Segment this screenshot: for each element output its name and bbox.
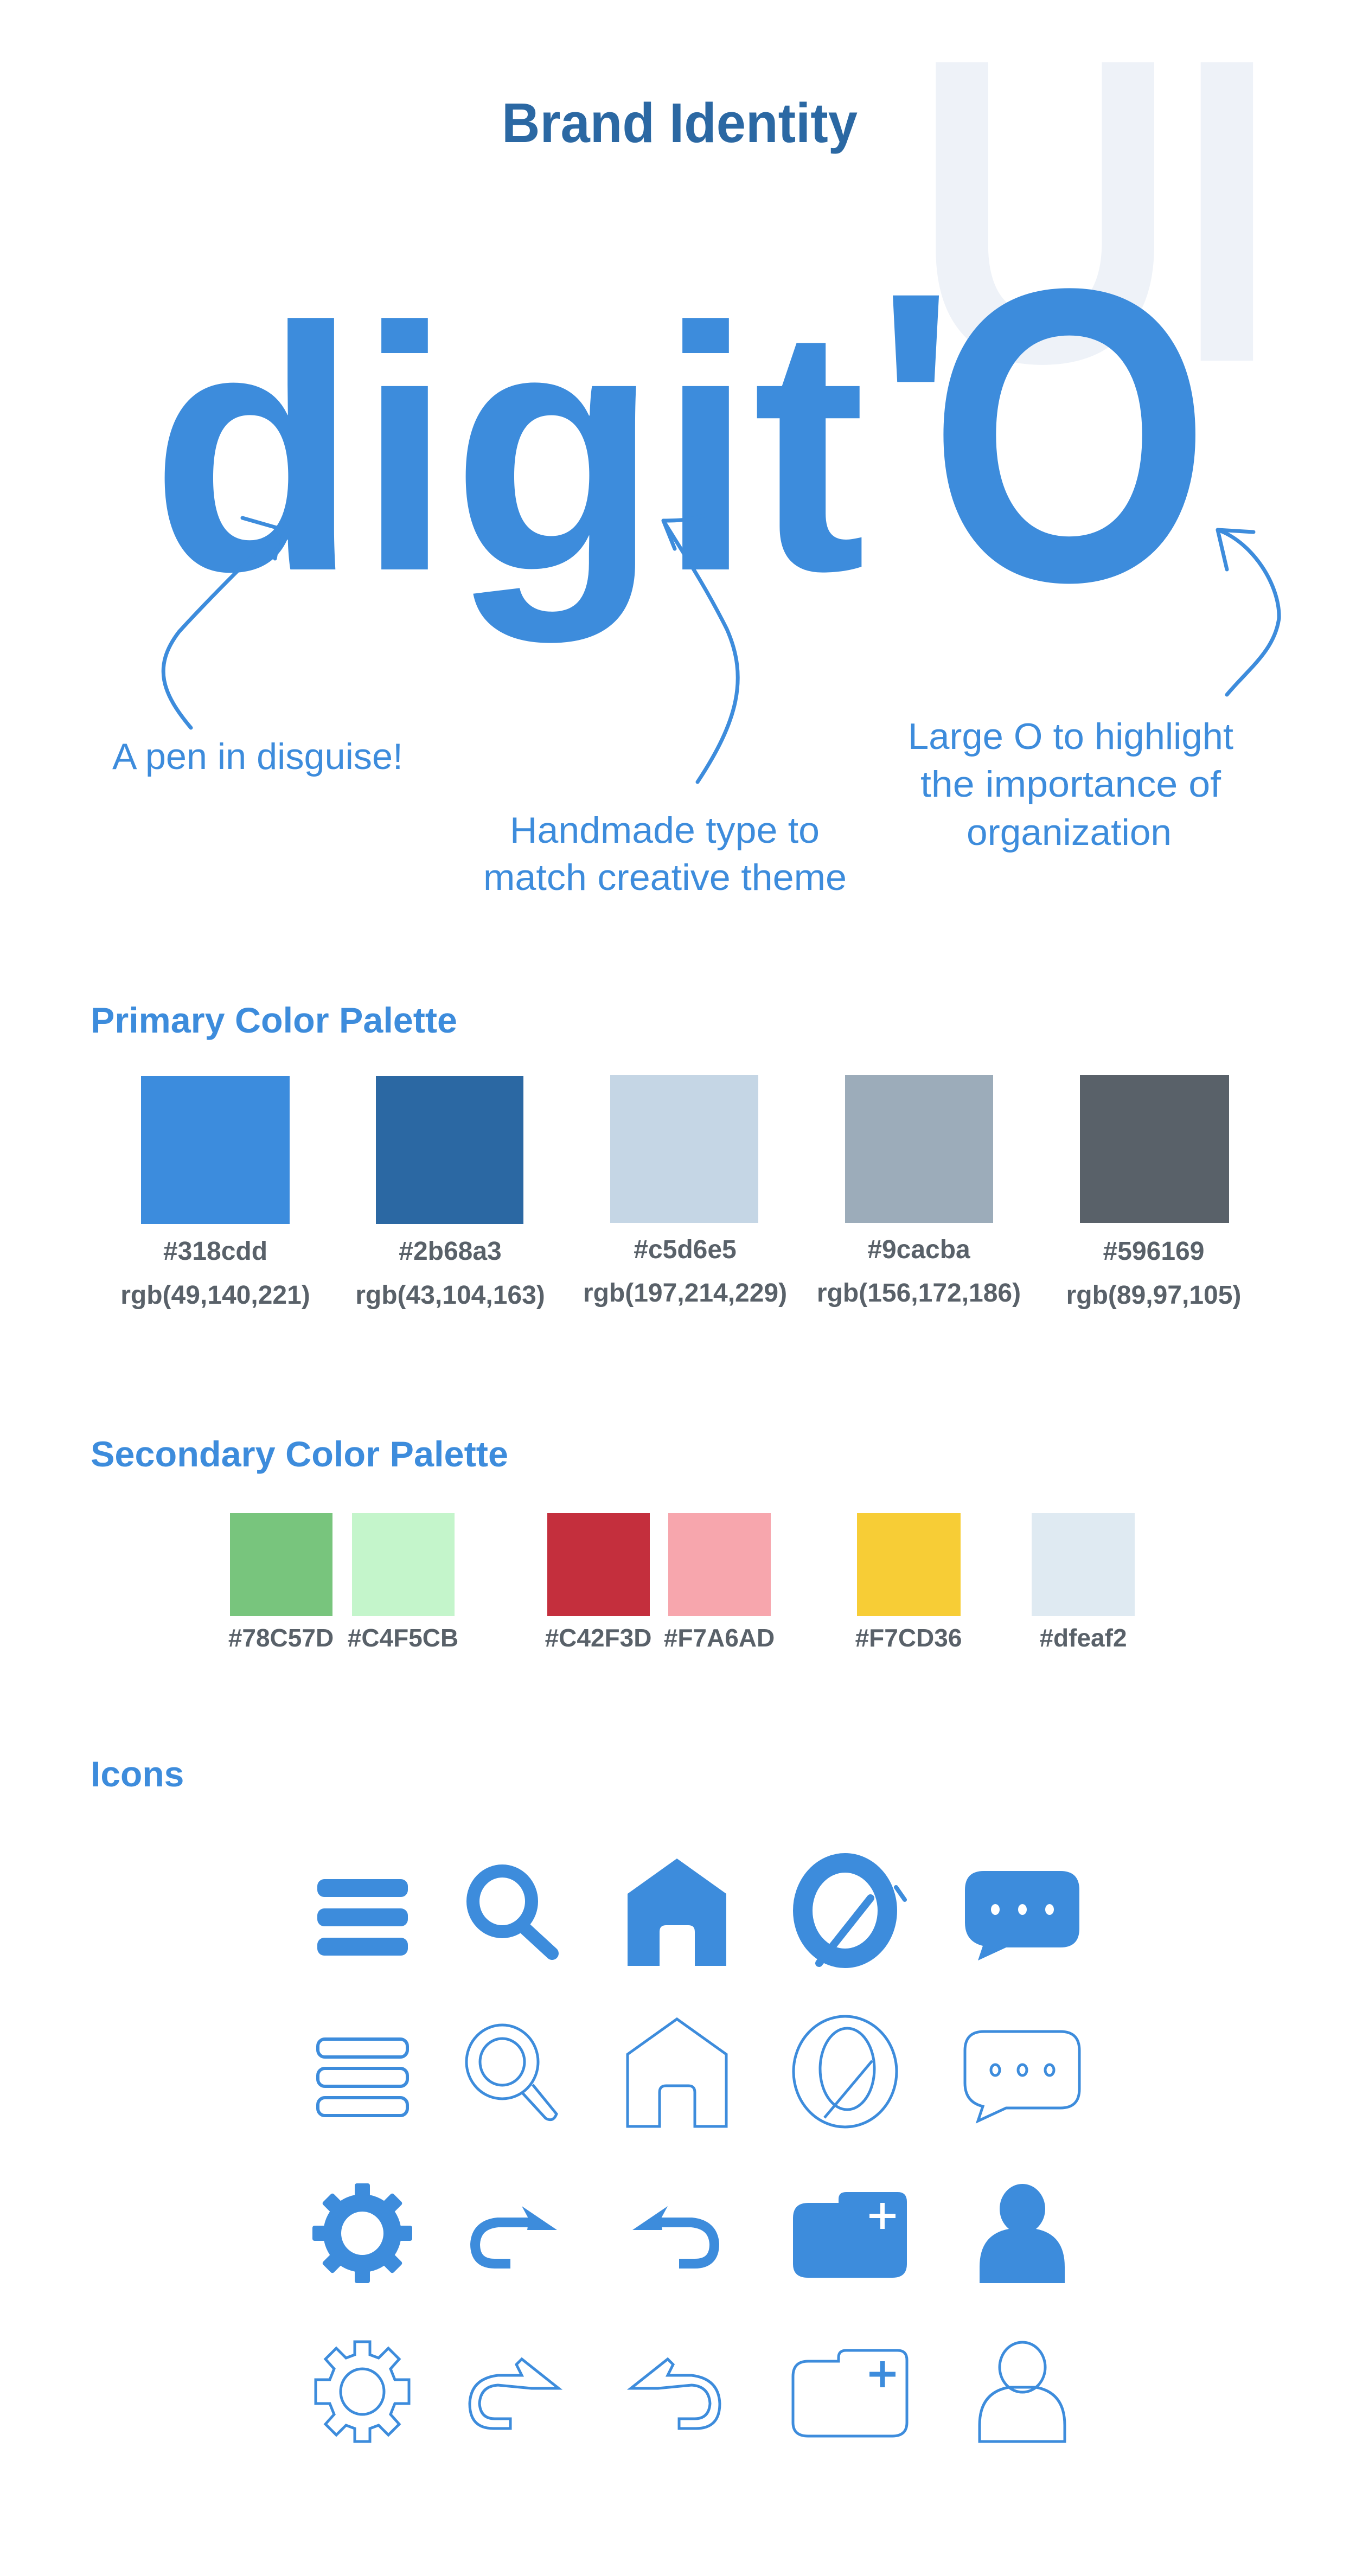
annotation: large O [908,716,1233,853]
annotation: handmade type: Handmade type to [510,810,820,851]
icon: folder filled [793,2192,907,2278]
icon: gear filled [312,2183,412,2283]
secondary labels: #dfeaf2 [1039,1624,1127,1652]
heading: secondary palette: Secondary Color Palette [91,1434,508,1474]
annotation: handmade type: match creative theme [483,857,847,898]
secondary labels: #C4F5CB [348,1624,458,1652]
icon: chat filled [965,1871,1079,1960]
icon: O logo filled [803,1863,905,1963]
icon: undo filled [632,2206,714,2264]
annotation: large O: organization [967,812,1172,853]
primary labels [120,1235,1241,1310]
icon: redo filled [475,2206,557,2264]
secondary labels: #F7A6AD [664,1624,775,1652]
title: Brand Identity [502,92,858,154]
icon: user filled [980,2184,1065,2283]
icon: chat outline [965,2032,1079,2121]
heading: icons: Icons [91,1754,184,1794]
icon: home filled [628,1859,726,1966]
primary labels: rgb(43,104,163) [355,1281,545,1310]
secondary swatches [230,1513,1135,1616]
secondary labels: #F7CD36 [855,1624,962,1652]
arrow: pen [163,518,280,728]
annotation: pen: A pen in disguise! [112,736,403,777]
primary labels: #9cacba [867,1235,970,1264]
heading: primary palette: Primary Color Palette [91,1000,457,1040]
icon: menu filled [317,1879,408,1956]
primary labels: #2b68a3 [399,1237,502,1266]
logo: digit'O: ' [874,220,957,608]
icon: folder outline [793,2350,907,2436]
primary labels: #318cdd [163,1237,267,1266]
primary labels: #c5d6e5 [634,1235,737,1264]
chat dots [991,1904,1054,1915]
primary labels: rgb(156,172,186) [817,1279,1021,1308]
arrow: large O [1218,530,1279,695]
icon: O logo outline [794,2016,897,2127]
icon: gear outline [316,2342,409,2442]
icon: search outline [466,2025,557,2120]
annotation: large O: the importance of [920,764,1221,805]
primary labels: rgb(49,140,221) [120,1281,310,1310]
secondary labels: #C42F3D [545,1624,651,1652]
icon: menu outline [318,2039,407,2116]
primary labels: #596169 [1103,1237,1204,1266]
primary labels: rgb(89,97,105) [1066,1281,1241,1310]
icon: redo outline [470,2359,559,2428]
secondary labels: #78C57D [228,1624,334,1652]
logo: digit'O [151,202,1211,669]
annotation: large O: Large O to highlight [908,716,1233,757]
primary labels: rgb(197,214,229) [583,1279,787,1308]
icon: home outline [628,2019,726,2126]
icon: search filled [473,1871,552,1953]
logo: digit'O: digit [151,255,866,645]
logo: digit'O: O [929,202,1211,669]
arrow: handmade type [663,515,738,782]
icon: undo outline [631,2359,720,2428]
icon: user outline [980,2342,1065,2442]
secondary labels [228,1624,1127,1652]
primary swatches [141,1075,1229,1224]
annotation: handmade type [483,810,847,898]
